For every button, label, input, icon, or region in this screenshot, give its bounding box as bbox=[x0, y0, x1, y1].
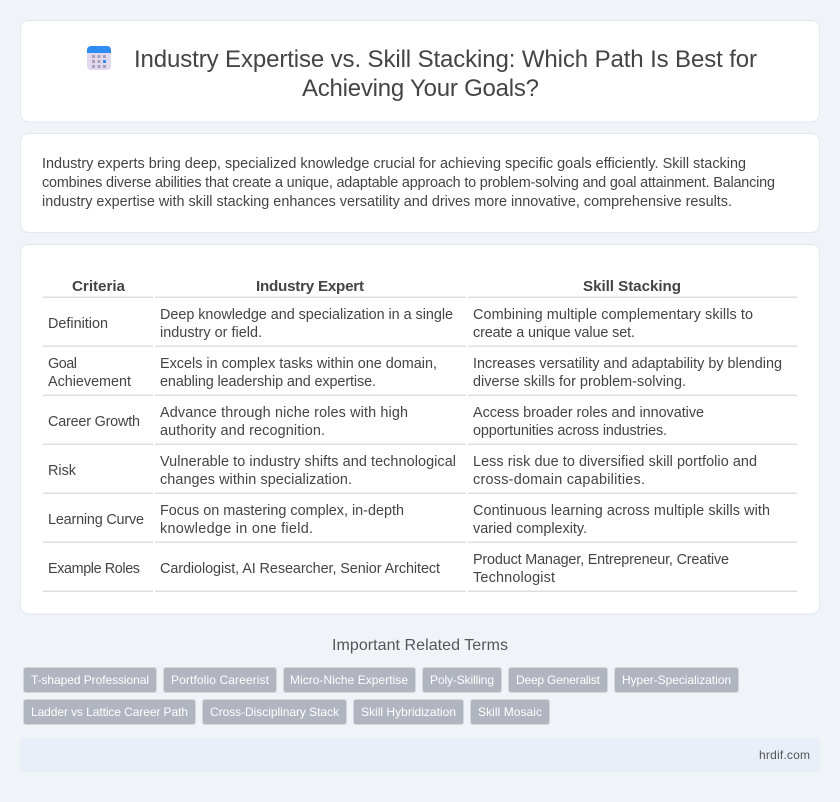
intro text: industry expertise with skill stacking enhances versatility and drives more innovative, comprehensive results. bbox=[42, 194, 732, 210]
row: goal achievement: Excels in complex tasks within one domain, bbox=[160, 356, 437, 372]
row: goal achievement: Goal bbox=[48, 356, 77, 372]
row: example roles: Product Manager, Entrepreneur, Creative bbox=[473, 552, 729, 568]
row: goal achievement: diverse skills for problem-solving. bbox=[473, 374, 686, 390]
icon: calendar bbox=[87, 46, 111, 70]
row: risk: changes within specialization. bbox=[160, 472, 352, 488]
intro text bbox=[42, 156, 775, 210]
row: risk: Less risk due to diversified skill portfolio and bbox=[473, 454, 757, 470]
table header: Skill Stacking bbox=[583, 278, 681, 295]
title: Industry Expertise vs. Skill Stacking: Which Path Is Best for bbox=[134, 46, 757, 73]
row: career growth: opportunities across industries. bbox=[473, 423, 667, 439]
row: goal achievement: Increases versatility and adaptability by blending bbox=[473, 356, 782, 372]
related term tags: Skill Hybridization bbox=[361, 705, 456, 719]
row: definition: create a unique value set. bbox=[473, 325, 635, 341]
row: learning curve: varied complexity. bbox=[473, 521, 587, 537]
table header: Industry Expert bbox=[256, 278, 364, 295]
row: risk: Risk bbox=[48, 463, 77, 479]
table header bbox=[72, 278, 681, 295]
row: career growth: Access broader roles and innovative bbox=[473, 405, 704, 421]
row: definition: Definition bbox=[48, 316, 108, 332]
related term tags: Portfolio Careerist bbox=[171, 673, 270, 687]
row: definition: industry or field. bbox=[160, 325, 262, 341]
row: career growth: Advance through niche roles with high bbox=[160, 405, 408, 421]
related term tags: Skill Mosaic bbox=[478, 705, 542, 719]
row: definition bbox=[48, 307, 753, 341]
row: career growth bbox=[48, 405, 704, 439]
row: definition: Combining multiple complementary skills to bbox=[473, 307, 753, 323]
row: learning curve: knowledge in one field. bbox=[160, 521, 313, 537]
footer bar: hrdif.com bbox=[759, 748, 810, 762]
related term tags: Ladder vs Lattice Career Path bbox=[31, 705, 188, 719]
row: example roles: Cardiologist, AI Researcher, Senior Architect bbox=[160, 561, 440, 577]
row: example roles: Example Roles bbox=[48, 561, 140, 577]
related term tags: Hyper-Specialization bbox=[622, 673, 731, 687]
row: definition: Deep knowledge and specialization in a single bbox=[160, 307, 453, 323]
row: learning curve: Continuous learning across multiple skills with bbox=[473, 503, 770, 519]
footer bar bbox=[20, 738, 820, 772]
row: example roles: Technologist bbox=[473, 570, 555, 586]
row: learning curve: Learning Curve bbox=[48, 512, 144, 528]
row: goal achievement bbox=[48, 356, 782, 390]
row: risk bbox=[48, 454, 757, 488]
related term tags: Micro-Niche Expertise bbox=[290, 673, 408, 687]
title bbox=[134, 46, 757, 102]
intro text: combines diverse abilities that create a unique, adaptable approach to problem-solving and goal attainment. Balancing bbox=[42, 175, 775, 191]
row: goal achievement: enabling leadership and expertise. bbox=[160, 374, 376, 390]
related term tags: Poly-Skilling bbox=[430, 673, 494, 687]
panel: introduction bbox=[20, 134, 820, 232]
row: career growth: authority and recognition. bbox=[160, 423, 325, 439]
intro text: Industry experts bring deep, specialized knowledge crucial for achieving specific goals efficiently. Skill stacking bbox=[42, 156, 746, 172]
row: learning curve bbox=[48, 503, 770, 537]
related term tags: T-shaped Professional bbox=[31, 673, 149, 687]
title: Achieving Your Goals? bbox=[302, 75, 539, 102]
row: risk: cross-domain capabilities. bbox=[473, 472, 645, 488]
row: career growth: Career Growth bbox=[48, 414, 140, 430]
row: risk: Vulnerable to industry shifts and technological bbox=[160, 454, 456, 470]
table header: Criteria bbox=[72, 278, 126, 295]
heading: related terms: Important Related Terms bbox=[332, 637, 508, 654]
related term tags: Cross-Disciplinary Stack bbox=[210, 705, 340, 719]
panel: comparison table bbox=[20, 244, 820, 614]
header panel bbox=[20, 20, 820, 122]
row: learning curve: Focus on mastering complex, in-depth bbox=[160, 503, 404, 519]
row: goal achievement: Achievement bbox=[48, 374, 131, 390]
related term tags bbox=[24, 668, 738, 724]
row: example roles bbox=[48, 552, 729, 586]
related term tags: Deep Generalist bbox=[516, 673, 601, 687]
